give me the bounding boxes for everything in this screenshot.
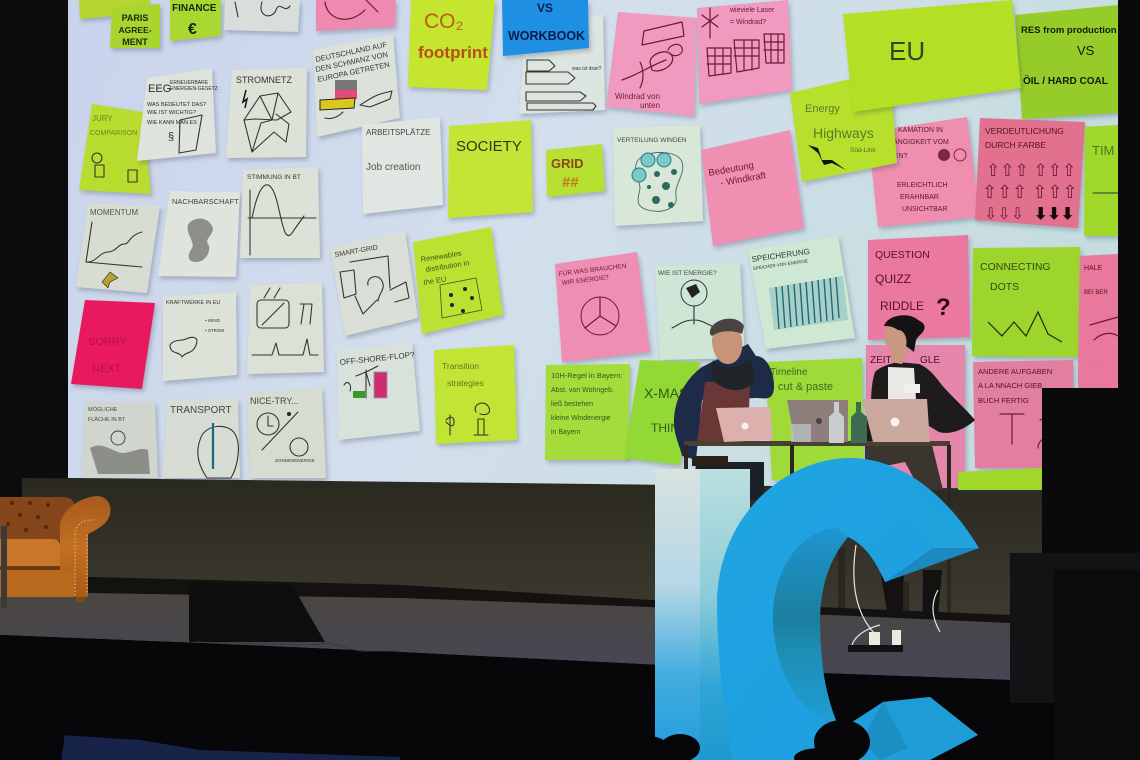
lectern face left	[655, 469, 700, 760]
cables and power strip	[848, 545, 940, 652]
note: pink visibility list: ÄNGIGKEIT VOM	[893, 138, 949, 146]
note: Andere Aufgaben: BUCH FERTIG	[978, 396, 1029, 405]
note: Verdeutlichung durch Farbe	[975, 118, 1085, 228]
note: Nachbarschaft	[158, 191, 240, 277]
sofa shadow line	[0, 566, 74, 570]
note: EEG: WIE KANN MAN ES	[147, 120, 197, 126]
right lower black block	[1054, 570, 1140, 760]
note: EEG: ENERGIEN-GESETZ	[170, 86, 218, 92]
desk with laptops and bottles	[684, 399, 951, 664]
note: 100 regel in bayern	[545, 364, 630, 460]
note: Wie ist Energie: WIE IST ENERGIE?	[658, 270, 717, 277]
big blue letter C	[717, 458, 979, 760]
woman legs and shoe	[880, 570, 942, 643]
note: energy highways	[790, 70, 897, 182]
note: EU green: EU	[889, 36, 925, 66]
C lower arm side face	[862, 702, 908, 760]
bottle two	[851, 402, 867, 443]
note: Arbeitsplätze job creation: Job creation	[366, 162, 420, 173]
man belt	[692, 456, 728, 466]
note: workbook blue	[502, 0, 589, 56]
note: Transition strategies: Transition	[442, 361, 479, 371]
note: Timeline cut and paste: cut & paste	[778, 381, 833, 393]
note: Paris agreement	[110, 4, 160, 48]
C upper terminal shading	[860, 480, 979, 548]
note: Grid	[546, 144, 605, 197]
note: pink wind turbine sketch	[606, 12, 697, 116]
note: RES versus coal	[1015, 5, 1136, 119]
note: CO2 footprint	[408, 0, 495, 90]
sofa back	[0, 497, 74, 541]
woman hair	[884, 315, 925, 352]
note: Deutschland Schuh: DEUTSCHLAND AUF	[315, 40, 388, 64]
note: Smart grid	[330, 231, 418, 336]
note: Verdeutlichung durch Farbe: ⇩⇩⇩	[984, 206, 1024, 223]
note: Verdeutlichung durch Farbe: VERDEUTLICHUNG	[985, 126, 1064, 136]
apple logos	[742, 418, 900, 430]
note: Speicherung: SPEICHERUNG	[751, 247, 810, 264]
note: Kraftwerke: • WIND	[205, 318, 221, 323]
note: Question quizz riddle: RIDDLE	[880, 299, 924, 313]
note: Renewables distribution: the EU	[423, 274, 447, 287]
note: pink wind turbine sketch: Windrad von	[615, 92, 660, 101]
note: pink visibility list	[868, 117, 980, 227]
curtain below the screen	[22, 478, 1118, 620]
note: pink sketch top	[316, 0, 396, 31]
note: Zeit pink behind speakers: GLE	[920, 355, 940, 366]
note: X-Mas	[624, 360, 700, 465]
note: pink turbine grids	[697, 0, 792, 104]
note: Finance	[170, 0, 221, 41]
note: Nice try: NICE-TRY...	[250, 396, 299, 406]
woman head	[884, 322, 913, 364]
note: Renewables distribution: distribution in	[425, 258, 470, 274]
note: Grid: GRID	[551, 156, 584, 171]
note: CO2 footprint: CO₂	[424, 10, 464, 33]
note: Timeline cut and paste	[765, 358, 864, 480]
note: energy highways: Highways	[813, 125, 874, 141]
note: Speicherung: SPEICHER VON ENERGIE	[752, 258, 808, 271]
note: pink Bedeutung Windkraft	[701, 130, 804, 246]
note: Deutschland Schuh: EUROPA GETRETEN	[317, 60, 390, 84]
note: Society: SOCIETY	[456, 138, 522, 155]
note: pink right edge: HALE	[1084, 265, 1103, 272]
note: energy highways: Energy	[805, 103, 840, 115]
note: Deutschland Schuh	[313, 34, 400, 137]
note: list sketch	[519, 14, 605, 114]
note: pink right edge: BEI BER	[1084, 290, 1108, 296]
man jacket	[674, 344, 774, 460]
note: Kraftwerke	[163, 292, 237, 381]
note: Momentum	[76, 203, 160, 293]
note: Paris agreement: MENT	[122, 37, 148, 47]
note: Arbeitsplätze job creation: ARBEITSPLÄTZE	[366, 128, 430, 137]
sofa tufting buttons	[6, 501, 50, 532]
heads centre	[624, 736, 672, 760]
man legs	[695, 462, 764, 500]
desk top	[684, 441, 950, 446]
note: pink wind turbine sketch: unten	[640, 101, 660, 110]
note: EEG	[137, 68, 218, 161]
C inner extrusion	[773, 528, 848, 730]
note: X-Mas: THING	[651, 421, 688, 435]
note: Nachbarschaft: NACHBARSCHAFT	[172, 197, 239, 206]
note: Question quizz riddle: ?	[936, 294, 951, 321]
note: Verdeutlichung durch Farbe: DURCH FARBE	[985, 140, 1046, 150]
note: Verdeutlichung durch Farbe: ⇧⇧⇧ ⇧⇧⇧	[982, 182, 1078, 202]
note: pink visibility list: ERLEICHTLICH	[897, 182, 948, 189]
desk legs	[684, 445, 951, 660]
stage floor	[0, 593, 1010, 680]
note: Verdeutlichung durch Farbe: ⇧⇧⇧ ⇧⇧⇧	[986, 161, 1076, 180]
sticky notes wall	[71, 0, 1136, 490]
note: Verteilung Winden map	[613, 125, 703, 226]
note: Smart grid: SMART-GRID	[334, 244, 379, 259]
note: timeline right: TIM	[1092, 143, 1114, 158]
stage monitor speaker	[189, 582, 325, 642]
woman white shirt	[888, 367, 916, 400]
C upper arm underside	[885, 548, 979, 582]
note: Paris agreement: PARIS	[122, 13, 148, 23]
note: Mögliche Flächen	[82, 402, 158, 478]
white and blue lectern	[655, 469, 750, 760]
note: Grid: ##	[562, 174, 579, 191]
man neck and head	[712, 329, 742, 364]
note: pink right edge	[1078, 254, 1118, 366]
sofa foot	[76, 597, 85, 602]
note: sketch top	[224, 0, 300, 32]
note: Stimmung chart: STIMMUNG IN BT	[247, 174, 301, 181]
note: Society	[448, 120, 533, 218]
sofa arm	[60, 496, 110, 597]
note: Andere Aufgaben: A LA NNACH GIEB	[978, 381, 1042, 390]
leather chesterfield sofa	[0, 496, 110, 608]
man hair	[710, 319, 744, 336]
note: 100 regel in bayern: ließ bestehen	[551, 401, 593, 408]
note: EEG: WIE IST WICHTIG?	[147, 110, 196, 116]
note: pink Bedeutung Windkraft: Bedeutung	[708, 160, 755, 179]
sofa arm studs	[75, 520, 95, 596]
note: Renewables distribution: Renewables	[420, 249, 462, 264]
note: jury sketch: COMPARISON	[90, 130, 137, 137]
note: 100 regel in bayern: kleine Windenergie	[551, 415, 611, 422]
lectern face right	[700, 469, 750, 760]
note: pink small right	[1078, 362, 1118, 388]
note: jury sketch	[79, 104, 151, 194]
note: Offshore flop: OFF-SHORE-FLOP?	[339, 350, 415, 367]
note: Wie ist Energie	[655, 263, 745, 360]
note: Nice try: SONNENENERGIE	[275, 458, 315, 463]
note: magenta note: NEXT	[92, 363, 122, 375]
note: Andere Aufgaben: ANDERE AUFGABEN	[978, 367, 1052, 376]
note: workbook blue: VS	[537, 1, 553, 15]
note: Andere Aufgaben	[973, 360, 1075, 468]
C lower arm top face	[883, 697, 978, 748]
man torso	[697, 382, 750, 442]
woman presenter	[863, 315, 975, 643]
note: Finance: FINANCE	[172, 3, 217, 14]
note: X-Mas: X-MAS	[644, 385, 688, 401]
sofa base	[0, 570, 76, 597]
note: pink Wofür energy pie: WIR ENERGIE?	[561, 274, 610, 287]
note: energy highways: Süd-Link	[850, 147, 876, 154]
note: EEG: EEG	[148, 83, 171, 95]
note: EEG: WAS BEDEUTET DAS?	[147, 102, 206, 108]
note: EEG: §	[168, 131, 174, 143]
blue floor strip	[60, 735, 400, 760]
C main face	[717, 458, 979, 760]
note: Deutschland Schuh: DEN SCHWANZ VON	[315, 50, 389, 74]
head low	[794, 748, 846, 760]
note: Offshore flop	[337, 342, 420, 440]
note: Mögliche Flächen: FLÄCHE IN BT	[88, 416, 126, 423]
note: Connecting dots: DOTS	[990, 281, 1019, 293]
note: EEG: ERNEUERBARE	[170, 80, 209, 86]
note: Verteilung Winden map: VERTEILUNG WINDEN	[617, 137, 687, 144]
note: magenta note: SORRY	[88, 336, 128, 348]
stage front	[0, 635, 1140, 760]
right floor equipment	[1010, 553, 1140, 703]
note: pink visibility list: UNSICHTBAR	[902, 206, 948, 213]
note: pink Bedeutung Windkraft: - Windkraft	[720, 170, 767, 189]
note: Nice try	[247, 388, 326, 478]
glasses	[791, 424, 811, 442]
note: Paris agreement: AGREE-	[118, 25, 152, 35]
note: Stimmung chart	[240, 167, 320, 258]
woman skirt	[865, 445, 943, 490]
head left	[0, 706, 64, 760]
desk base frame	[822, 645, 951, 664]
note: Kraftwerke: • STROM	[205, 328, 224, 333]
laptop left	[716, 407, 773, 442]
power strip	[848, 645, 903, 652]
white cables	[852, 545, 940, 645]
note: timeline right	[1084, 125, 1118, 236]
note: EU green	[843, 0, 1021, 112]
note: TV and heartbeat	[247, 283, 324, 374]
floor stand	[1, 526, 7, 608]
note: Connecting dots: CONNECTING	[980, 261, 1051, 273]
projection screen	[68, 0, 1118, 490]
note: strip top left	[79, 0, 150, 19]
note: CO2 footprint: footprint	[418, 43, 488, 62]
note: jury sketch: JURY	[92, 114, 113, 123]
sofa seat cushion	[0, 539, 62, 566]
note: pink visibility list: ERAHNBAR	[900, 194, 939, 201]
note: pink turbine grids: = Windrad?	[730, 19, 766, 26]
note: pink Wofür energy pie: FÜR WAS BRAUCHEN	[558, 262, 627, 278]
note: Kraftwerke: KRAFTWERKE IN EU	[166, 300, 220, 306]
woman torso jacket	[863, 362, 975, 444]
laptop right	[862, 399, 930, 442]
note: Zeit pink behind speakers	[866, 345, 965, 488]
head right	[814, 720, 870, 760]
note: Renewables distribution	[413, 227, 503, 334]
note: Transport: TRANSPORT	[170, 405, 232, 416]
note: 100 regel in bayern: in Bayern	[551, 429, 581, 436]
note: Stromnetz: STROMNETZ	[236, 75, 292, 85]
note: Zeit pink behind speakers: ZEIT	[870, 355, 892, 366]
note: magenta note	[71, 300, 155, 389]
note: pink visibility list: MEN?	[888, 153, 908, 160]
note: RES versus coal: VS	[1077, 43, 1095, 58]
note: Finance: €	[188, 21, 197, 38]
note: Question quizz riddle: QUESTION	[875, 249, 930, 261]
note: Mögliche Flächen: MÖGLICHE	[88, 406, 118, 413]
woman badge	[904, 384, 920, 393]
note: Connecting dots	[972, 247, 1080, 357]
note: Speicherung	[748, 236, 855, 349]
note: green strip bottom right	[958, 468, 1045, 490]
note: 100 regel in bayern: 10H-Regel in Bayern:	[551, 371, 623, 380]
black strip right of screen	[1118, 0, 1140, 388]
note: Question quizz riddle	[868, 235, 970, 340]
note: Verdeutlichung durch Farbe: ⬇⬇⬇	[1034, 206, 1074, 223]
note: pink visibility list: KAMATION IN	[898, 127, 943, 134]
note: Transition strategies: strategies	[447, 378, 484, 388]
note: list sketch: was ist dran?	[572, 66, 602, 72]
audience heads	[0, 706, 870, 760]
head centre two	[660, 734, 700, 760]
man scarf	[711, 358, 755, 390]
note: pink turbine grids: wieviele Laser	[729, 7, 775, 14]
note: workbook blue: WORKBOOK	[508, 29, 585, 43]
note: Stromnetz	[226, 68, 307, 158]
note: Momentum: MOMENTUM	[90, 208, 138, 217]
note: Timeline cut and paste: Timeline	[770, 367, 808, 378]
black speaker box right	[1042, 388, 1140, 570]
bottle one	[829, 402, 844, 443]
monitor cable	[195, 642, 400, 651]
note: Question quizz riddle: QUIZZ	[875, 272, 911, 286]
power strip plugs	[869, 632, 880, 646]
note: Transport	[162, 398, 240, 478]
note: 100 regel in bayern: Abst. von Wohngeb.	[551, 387, 614, 394]
note: RES versus coal: ÖIL / HARD COAL	[1023, 74, 1108, 87]
note: RES versus coal: RES from production to c	[1021, 25, 1136, 36]
man presenter	[674, 319, 774, 500]
laptop middle	[787, 400, 848, 442]
stage shadow under curtain	[0, 577, 1010, 623]
note: pink Wofür energy pie	[555, 252, 650, 362]
note: Transition strategies	[434, 345, 517, 444]
note: Arbeitsplätze job creation	[362, 117, 443, 214]
